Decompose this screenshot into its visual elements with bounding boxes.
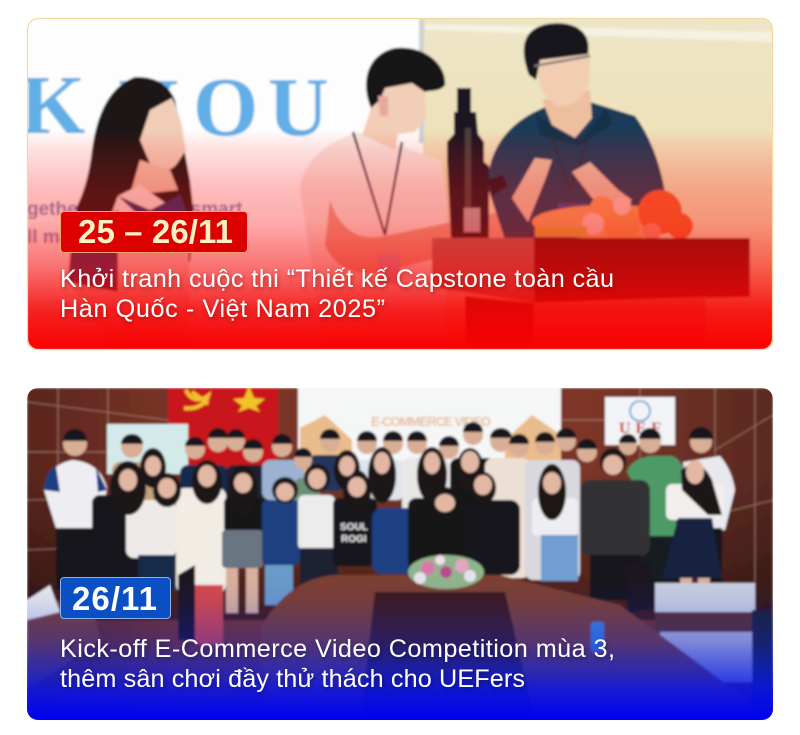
backdrop lettering: O bbox=[193, 61, 258, 154]
date badge: 26/11: 26/11 bbox=[72, 580, 157, 617]
panel: capstone competition card bbox=[20, 18, 773, 350]
people: back row bbox=[112, 422, 637, 580]
person: boy in green shirt bbox=[627, 428, 686, 610]
object: red podium bbox=[431, 236, 751, 335]
backdrop lettering: gether to create a smart bbox=[27, 199, 243, 220]
heads: front row bbox=[110, 447, 722, 520]
headline: e-commerce: thêm sân chơi đầy thử thách cho UEFers bbox=[60, 665, 525, 693]
backdrop lettering: U bbox=[268, 61, 329, 154]
person: boy in white and navy polo, left bbox=[44, 429, 107, 590]
panel: e-commerce video competition card bbox=[27, 386, 775, 720]
object: flower bouquet bbox=[408, 555, 484, 589]
flag backdrop bbox=[168, 386, 278, 473]
people: front row girls: ROGI bbox=[341, 534, 367, 545]
object: conference table bbox=[27, 575, 775, 720]
object: orange flower arrangement bbox=[532, 190, 693, 242]
projector screen bbox=[298, 388, 561, 478]
headline: capstone bbox=[60, 265, 614, 323]
headline: capstone: Hàn Quốc - Việt Nam 2025” bbox=[60, 295, 385, 323]
person: girl on left bbox=[68, 76, 195, 298]
headline: e-commerce: Kick-off E-Commerce Video Competition mùa 3, bbox=[60, 635, 615, 663]
poster bbox=[107, 424, 188, 474]
backdrop lettering: K bbox=[20, 59, 85, 152]
people: front row girls: SOUL bbox=[340, 522, 368, 533]
headline: e-commerce bbox=[60, 635, 615, 693]
object: water bottle bbox=[591, 622, 604, 652]
object: floor and chairs bbox=[178, 562, 755, 682]
person: boy in white shirt with lanyard bbox=[300, 46, 505, 308]
date badge: 25 - 26/11: 25 – 26/11 bbox=[78, 213, 233, 250]
UEF logo sign: UEF bbox=[619, 420, 661, 437]
card outline bbox=[28, 18, 772, 350]
object: black tower model on podium bbox=[447, 88, 508, 240]
backdrop lettering: ll make a future. bbox=[27, 227, 172, 248]
photo: group of students in a meeting room bbox=[27, 386, 775, 720]
projector screen: E-COMMERCE VIDEO bbox=[371, 414, 491, 429]
headline: capstone: Khởi tranh cuộc thi “Thiết kế Capstone toàn cầu bbox=[60, 265, 614, 293]
person: boy in white and navy polo, right bbox=[683, 427, 735, 610]
date badge: 26/11 bbox=[60, 578, 170, 618]
person: presenter in navy polo with glasses bbox=[487, 23, 667, 240]
photo: students presenting at a podium bbox=[20, 18, 773, 350]
backdrop lettering: Y bbox=[118, 62, 179, 155]
backdrop lettering bbox=[28, 76, 328, 244]
UEF logo sign bbox=[605, 397, 675, 445]
people: front row girls bbox=[90, 479, 723, 615]
